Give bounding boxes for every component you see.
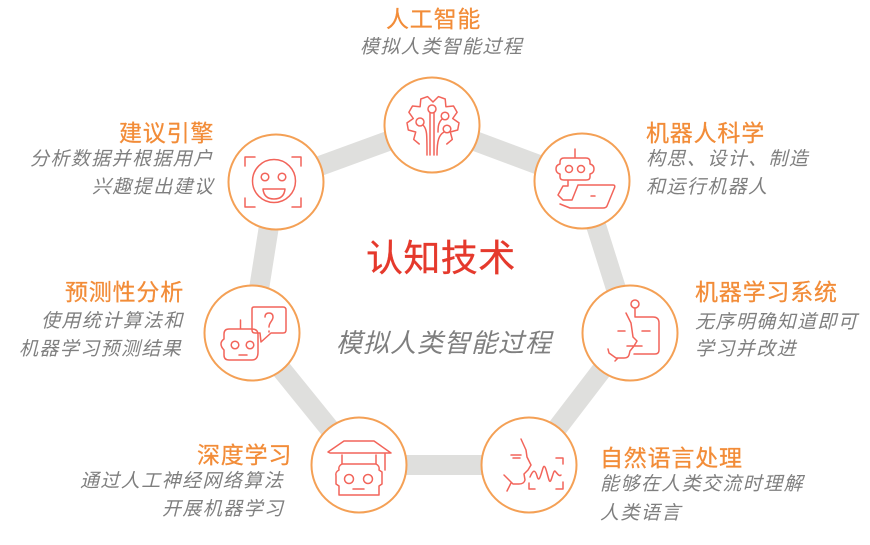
description: 开展机器学习 <box>162 498 285 520</box>
description: 机器学习预测结果 <box>19 338 182 360</box>
description: 兴趣提出建议 <box>92 177 215 198</box>
icon circle: robot with laptop <box>534 134 630 228</box>
node: recommendation engine <box>30 120 324 230</box>
description: 人类语言 <box>600 503 683 524</box>
description: 使用统计算法和 <box>41 310 184 332</box>
icon circle: speaking face <box>482 418 576 512</box>
icon circle: robot with graduation cap <box>312 418 406 512</box>
heading: 深度学习 <box>197 442 292 468</box>
description: 分析数据并根据用户 <box>30 148 214 170</box>
central subtitle: 模拟人类智能过程 <box>336 328 554 358</box>
description: 无序明确知道即可 <box>695 311 860 333</box>
description: 构思、设计、制造 <box>646 149 810 170</box>
heading: 人工智能 <box>386 6 481 32</box>
node: natural language processing <box>482 418 806 524</box>
icon circle: face and robot profile <box>582 286 678 380</box>
description <box>30 148 215 198</box>
node: predictive analytics <box>19 279 300 380</box>
description <box>695 311 860 360</box>
heading: 预测性分析 <box>65 279 184 305</box>
node: machine learning systems <box>582 279 860 380</box>
description <box>19 310 184 360</box>
description <box>600 473 806 524</box>
description: 模拟人类智能过程 <box>360 36 525 58</box>
icon circle: robot with question bubble <box>204 286 300 380</box>
node: deep learning <box>80 418 406 520</box>
central title: 认知技术 <box>366 238 516 279</box>
description: 学习并改进 <box>695 338 798 360</box>
description <box>80 470 285 520</box>
node: robotics <box>534 120 810 228</box>
heading: 建议引擎 <box>119 120 214 146</box>
description <box>646 149 810 198</box>
heading: 机器学习系统 <box>695 279 838 305</box>
description: 能够在人类交流时理解 <box>600 473 806 495</box>
heading: 自然语言处理 <box>600 445 743 471</box>
heptagon ring connector <box>252 125 630 465</box>
description: 通过人工神经网络算法 <box>80 470 285 492</box>
icon circle: gear tree <box>384 78 480 172</box>
description: 和运行机器人 <box>646 177 768 198</box>
heading: 机器人科学 <box>646 120 765 146</box>
icon circle: smiley in frame <box>228 134 324 230</box>
node: artificial intelligence <box>360 6 525 172</box>
